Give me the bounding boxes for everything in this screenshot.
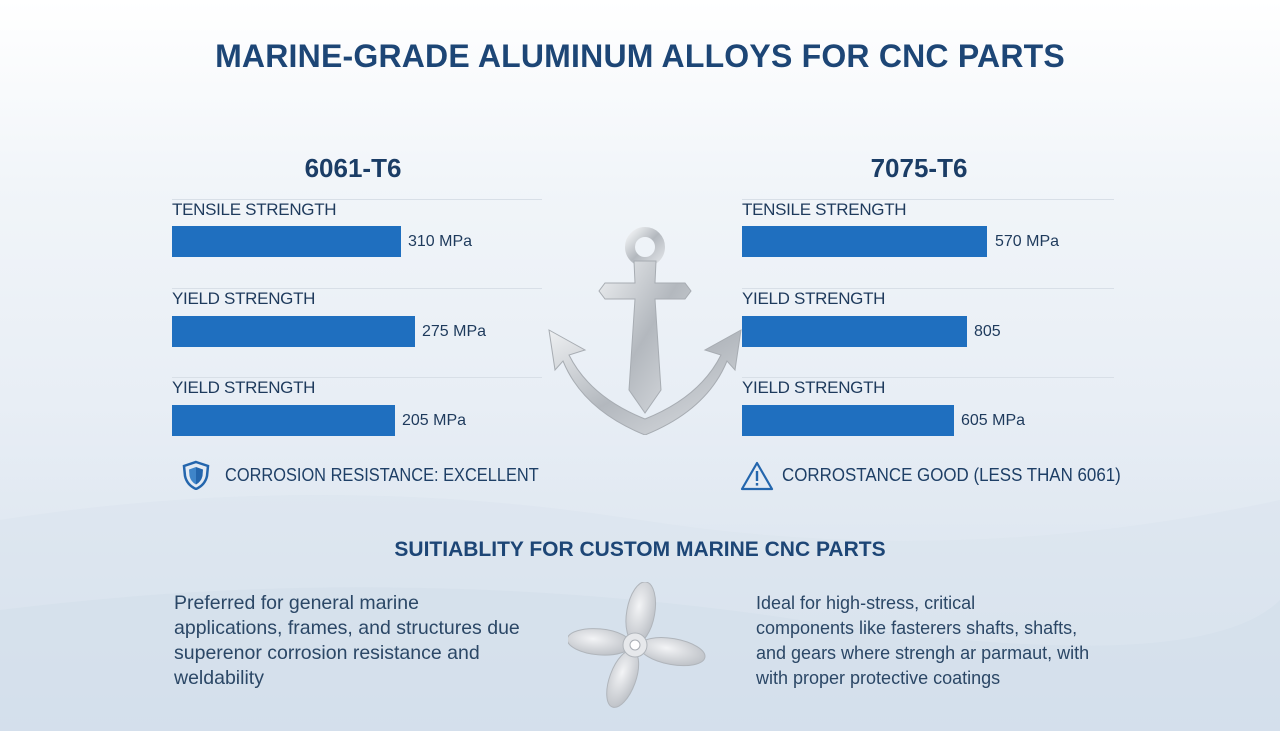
text: 7075 suitability: and gears where strengh ar parmaut, with (756, 643, 1089, 663)
value 275: 275 MPa (422, 323, 486, 340)
label yield 2: YIELD STRENGTH (172, 378, 315, 397)
label tensile: TENSILE STRENGTH (172, 200, 336, 219)
value 605: 605 MPa (961, 412, 1025, 429)
text: 6061 suitability: superenor corrosion resistance and (174, 642, 480, 664)
label tensile: TENSILE STRENGTH (742, 200, 906, 219)
label yield: YIELD STRENGTH (172, 289, 315, 308)
corrosion 7075: CORROSTANCE GOOD (LESS THAN 6061) (782, 465, 1121, 485)
bar 310 (172, 226, 401, 257)
panel: 7075-T6 (740, 153, 1121, 490)
text: 7075 suitability (756, 593, 1089, 688)
bar 805 (742, 316, 967, 347)
section heading: SUITIABLITY FOR CUSTOM MARINE CNC PARTS (394, 538, 886, 561)
text: 7075 suitability: components like fasterers shafts, shafts, (756, 618, 1077, 638)
bar 205 (172, 405, 395, 436)
value 805: 805 (974, 323, 1001, 340)
icon: anchor (548, 227, 742, 435)
corrosion 7075 (740, 462, 1121, 490)
text: 6061 suitability: weldability (174, 667, 264, 689)
icon: warning (740, 462, 774, 490)
value 310: 310 MPa (408, 233, 472, 250)
title: MARINE-GRADE ALUMINUM ALLOYS FOR CNC PARTS (215, 38, 1065, 74)
bar 605 (742, 405, 954, 436)
icon: propeller (568, 582, 706, 708)
value 570: 570 MPa (995, 233, 1059, 250)
text: 6061 suitability (174, 592, 520, 689)
text: 6061 suitability: Preferred for general marine (174, 592, 419, 614)
bar 275 (172, 316, 415, 347)
text: 6061 suitability: applications, frames, and structures due (174, 617, 520, 639)
panel: 6061-T6 (172, 153, 542, 490)
heading 7075: 7075-T6 (871, 153, 967, 183)
corrosion 6061: CORROSION RESISTANCE: EXCELLENT (225, 465, 539, 485)
value 205: 205 MPa (402, 412, 466, 429)
text: 7075 suitability: with proper protective coatings (756, 668, 1000, 688)
text: 7075 suitability: Ideal for high-stress, critical (756, 593, 975, 613)
heading 6061: 6061-T6 (305, 153, 401, 183)
icon: shield (182, 460, 210, 490)
bar 570 (742, 226, 987, 257)
corrosion 6061 (182, 460, 539, 490)
label yield 2: YIELD STRENGTH (742, 378, 885, 397)
label yield: YIELD STRENGTH (742, 289, 885, 308)
